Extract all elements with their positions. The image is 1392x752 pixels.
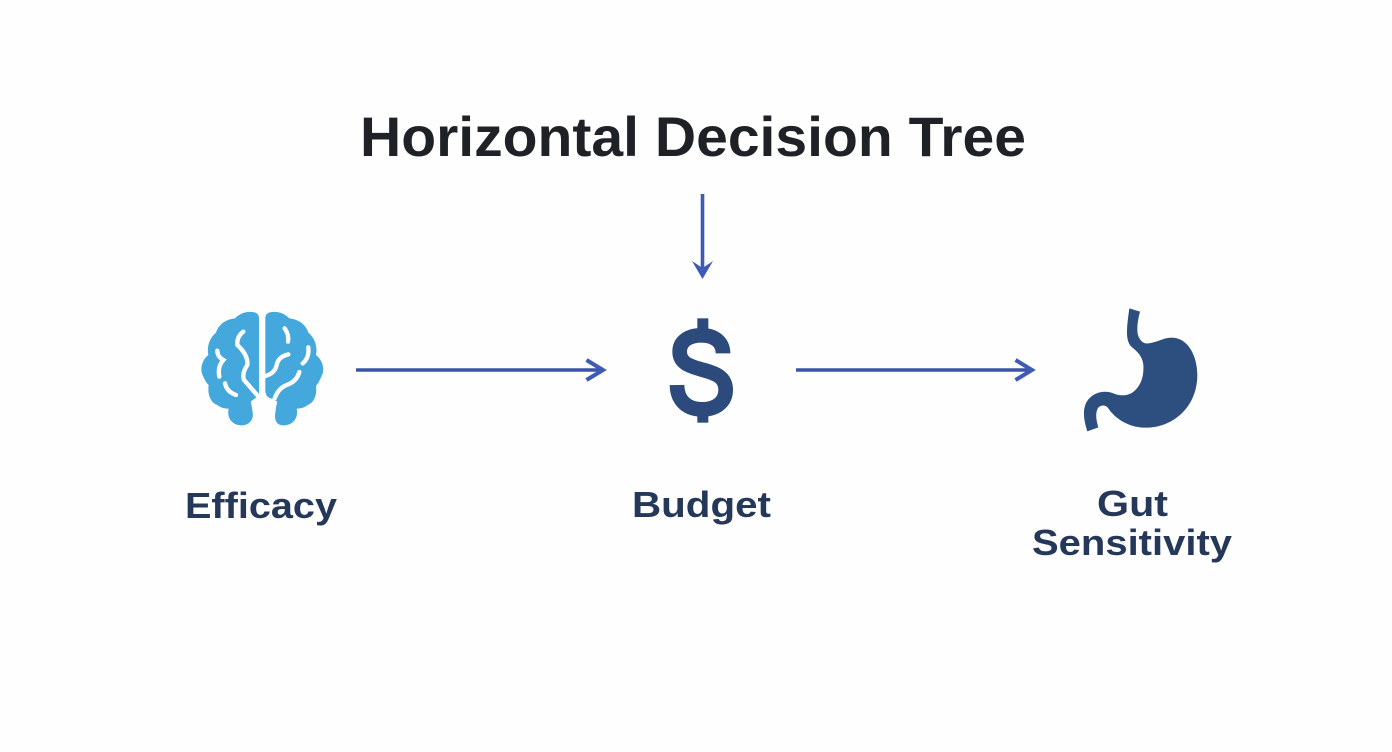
icon: brain — [201, 312, 323, 425]
icon: dollar sign — [677, 318, 726, 423]
icon: stomach — [1084, 308, 1197, 431]
left fold lines — [237, 332, 257, 395]
label: gut sensitivity: Gut — [1097, 483, 1168, 524]
right fold lines — [285, 328, 288, 342]
arrow: title to budget — [692, 194, 713, 279]
label: budget: Budget — [632, 484, 771, 525]
arrow: budget to gut sensitivity — [796, 360, 1032, 380]
label: efficacy: Efficacy — [185, 485, 337, 526]
label: gut sensitivity — [1032, 483, 1232, 563]
arrow: efficacy to budget — [356, 360, 603, 380]
title: Horizontal Decision Tree — [360, 105, 1026, 168]
label: gut sensitivity: Sensitivity — [1032, 522, 1232, 563]
